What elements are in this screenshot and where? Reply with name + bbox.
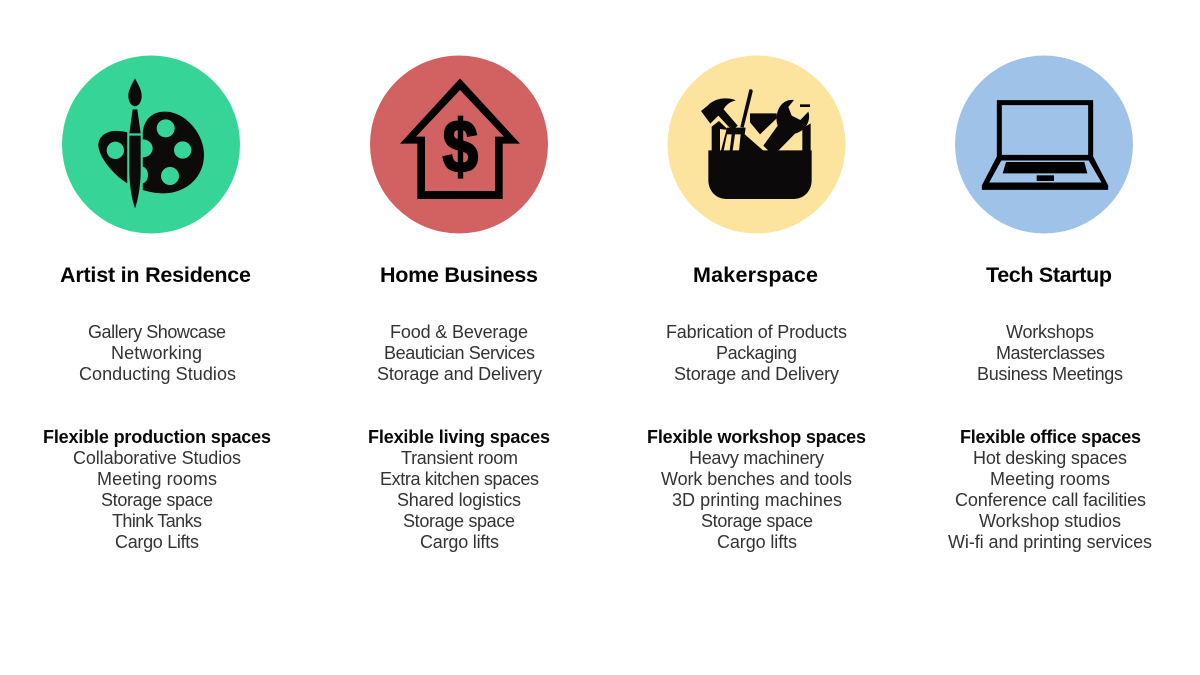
panel: Makerspace (647, 56, 866, 552)
icon: yellow circle with toolbox (668, 56, 846, 234)
list: flexible office spaces: Meeting rooms (990, 469, 1110, 489)
panel: Home Business (368, 56, 550, 552)
panel: Artist in Residence (43, 56, 271, 552)
list: activities (377, 322, 542, 384)
title: Artist in Residence: Artist in Residence (60, 263, 251, 287)
list: flexible living spaces: Shared logistics (397, 490, 521, 510)
list: flexible workshop spaces: Work benches and tools (661, 469, 852, 489)
list: activities: Storage and Delivery (674, 364, 839, 384)
panel: Tech Startup (948, 56, 1152, 552)
list: flexible production spaces: Cargo Lifts (115, 532, 199, 552)
list: activities: Business Meetings (977, 364, 1123, 384)
title: Tech Startup: Tech Startup (986, 263, 1112, 287)
list: flexible living spaces: Flexible living spaces (368, 427, 550, 447)
list: activities: Conducting Studios (79, 364, 236, 384)
list: flexible living spaces: Storage space (403, 511, 515, 531)
list: flexible production spaces: Meeting rooms (97, 469, 217, 489)
list: activities: Storage and Delivery (377, 364, 542, 384)
icon: red circle with house and dollar sign (370, 56, 548, 234)
list: flexible workshop spaces: Cargo lifts (717, 532, 797, 552)
icon: red circle with house and dollar sign: $ (443, 106, 478, 188)
list: flexible production spaces (43, 427, 271, 552)
list: activities (666, 322, 847, 384)
list: activities (79, 322, 236, 384)
list: activities: Networking (111, 343, 202, 363)
title: Makerspace: Makerspace (693, 263, 818, 287)
title: Home Business: Home Business (380, 263, 538, 287)
list: flexible workshop spaces: Flexible workshop spaces (647, 427, 866, 447)
list: flexible living spaces (368, 427, 550, 552)
list: activities: Fabrication of Products (666, 322, 847, 342)
list: flexible office spaces: Workshop studios (979, 511, 1121, 531)
list: flexible office spaces: Hot desking spaces (973, 448, 1127, 468)
list: flexible living spaces: Cargo lifts (420, 532, 499, 552)
list: flexible production spaces: Flexible production spaces (43, 427, 271, 447)
list: flexible production spaces: Think Tanks (112, 511, 202, 531)
list: flexible office spaces: Flexible office spaces (960, 427, 1141, 447)
list: flexible production spaces: Collaborative Studios (73, 448, 241, 468)
list: activities (977, 322, 1123, 384)
list: activities: Gallery Showcase (88, 322, 226, 342)
list: flexible living spaces: Transient room (401, 448, 518, 468)
list: flexible workshop spaces: 3D printing machines (672, 490, 842, 510)
list: activities: Workshops (1006, 322, 1094, 342)
icon: blue circle with laptop (955, 56, 1133, 234)
list: activities: Beautician Services (384, 343, 535, 363)
list: flexible office spaces: Wi-fi and printing services (948, 532, 1152, 552)
list: flexible living spaces: Extra kitchen spaces (380, 469, 539, 489)
list: flexible workshop spaces: Storage space (701, 511, 813, 531)
icon: green circle with palette and paintbrush (62, 56, 240, 234)
list: flexible workshop spaces (647, 427, 866, 552)
list: activities: Food & Beverage (390, 322, 528, 342)
list: flexible office spaces: Conference call facilities (955, 490, 1146, 510)
list: activities: Packaging (716, 343, 797, 363)
list: flexible office spaces (948, 427, 1152, 552)
list: flexible production spaces: Storage space (101, 490, 213, 510)
list: activities: Masterclasses (996, 343, 1105, 363)
list: flexible workshop spaces: Heavy machinery (689, 448, 824, 468)
